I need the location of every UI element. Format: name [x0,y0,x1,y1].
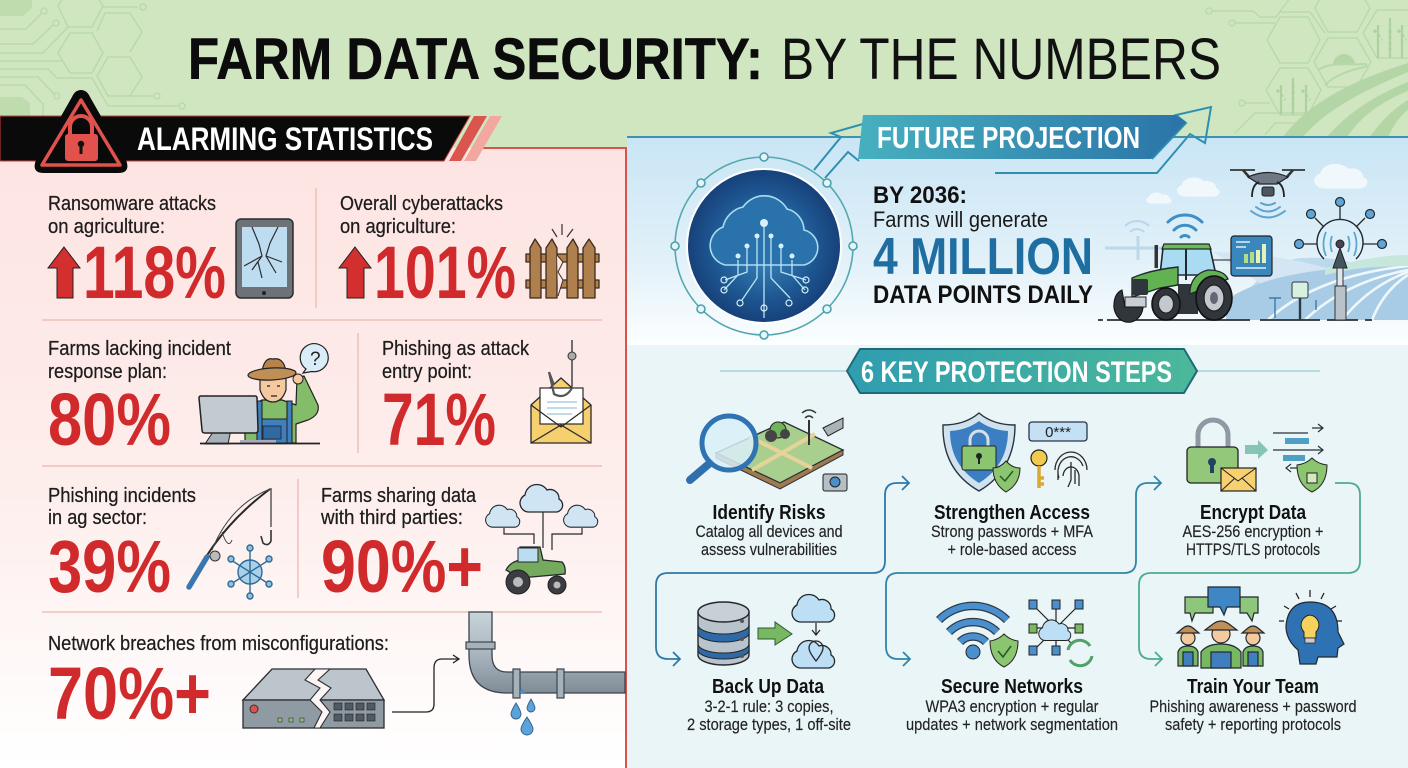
icon: confused farmer at computer: ? [310,349,321,370]
heading: 6 key protection steps: 6 KEY PROTECTION STEPS [861,356,1172,389]
header background [0,0,1408,200]
panel: protection steps [627,345,1408,768]
icon: signal tower [1292,198,1386,320]
heading: 6 key protection steps [847,349,1197,393]
icon: hook and envelope [531,340,591,443]
divider [357,333,359,453]
step: train your team: safety + reporting protocols [1165,716,1341,734]
stat: phishing incidents: 39% [48,525,171,608]
arrow: step 1 to step 2 and step 4 [656,476,909,666]
stat: incident response plan [48,337,328,461]
stat: phishing entry point: Phishing as attack [382,337,530,360]
step: secure networks: updates + network segmentation [906,716,1118,734]
icon: farmers and idea head [1177,587,1344,668]
icon: green tractor [1114,244,1232,322]
icon: fishing rod and network [189,488,272,599]
icon: drone [1230,170,1305,218]
stat: third party data sharing [320,484,598,608]
step: identify risks: Identify Risks [712,502,826,524]
step: secure networks: WPA3 encryption + regular [926,698,1099,716]
arrow: step 3 to step 6 [1139,483,1360,666]
stat: third party data sharing: with third parties: [320,506,463,529]
step: strengthen access: + role-based access [948,541,1076,559]
stat: overall cyberattacks: Overall cyberattacks [340,192,503,215]
icon: cracked tablet [236,219,293,298]
icon: magnifier over farm map [690,410,847,491]
title: FARM DATA SECURITY: [188,27,763,92]
decoration: right hex and field pattern [1206,0,1408,135]
stat: overall cyberattacks: 101% [374,231,516,314]
stat: ransomware attacks: Ransomware attacks [48,192,216,215]
stat: incident response plan: Farms lacking incident [48,337,231,360]
step: encrypt data: HTTPS/TLS protocols [1186,541,1320,559]
text: projection figures: Farms will generate [873,207,1048,232]
step: identify risks: assess vulnerabilities [701,541,837,559]
icon: warning triangle with padlock [35,90,127,173]
stat: ransomware attacks: on agriculture: [48,215,165,238]
stat: overall cyberattacks [339,192,599,314]
scene: farm hills background [1098,164,1408,320]
icon: database to clouds [698,594,835,668]
step: strengthen access [931,413,1093,559]
stat: third party data sharing: Farms sharing data [321,484,477,507]
stat: phishing entry point: 71% [382,378,496,461]
icon: wifi, shield, network [939,600,1092,667]
step: strengthen access: Strengthen Access [934,502,1090,524]
icon: tractor linked to clouds [486,484,598,594]
icon: up arrow [339,247,371,298]
divider [42,319,602,321]
stat: third party data sharing: 90%+ [321,525,483,608]
banner: alarming statistics: ALARMING STATISTICS [137,121,433,157]
banner: alarming statistics [0,116,502,161]
stat: phishing incidents: Phishing incidents [48,484,196,507]
stat: overall cyberattacks: on agriculture: [340,215,456,238]
step: encrypt data: Encrypt Data [1200,502,1307,524]
stat: network breaches [48,612,625,735]
icon: chart panel [1213,236,1272,276]
title: BY THE NUMBERS [781,27,1221,92]
divider [42,611,602,613]
text: projection figures: DATA POINTS DAILY [873,281,1093,309]
stat: phishing entry point [382,337,591,461]
stat: phishing incidents [48,484,272,608]
text: projection figures: 4 MILLION [873,228,1093,286]
arrow: step 2 to step 3 and step 5 [886,476,1161,666]
step: encrypt data: AES-256 encryption + [1182,523,1324,541]
step: back up data: 2 storage types, 1 off-site [687,716,851,734]
icon: digital cloud circle [671,153,857,339]
icon: shield, key, fingerprint: 0*** [1045,424,1071,441]
step: encrypt data [1182,420,1327,559]
stat: incident response plan: 80% [48,378,171,461]
step: identify risks [690,410,847,559]
stat: phishing incidents: in ag sector: [48,506,147,529]
step: train your team [1150,587,1356,734]
step: secure networks: Secure Networks [941,676,1083,698]
icon: shield, key, fingerprint [943,413,1087,492]
stat: phishing entry point: entry point: [382,360,472,383]
step: train your team: Phishing awareness + password [1150,698,1356,716]
step: back up data [687,594,851,734]
stat: ransomware attacks: 118% [83,231,226,314]
divider [42,465,602,467]
step: train your team: Train Your Team [1187,676,1319,698]
icon: confused farmer at computer [199,344,328,444]
stat: network breaches: 70%+ [48,652,211,735]
step: back up data: Back Up Data [712,676,825,698]
panel: future projection [627,107,1408,345]
icon: broken fence [526,224,599,298]
stat: ransomware attacks [48,192,293,314]
title [188,27,1221,92]
text: projection figures: BY 2036: [873,182,967,209]
icon: padlock, envelope, data [1187,420,1327,492]
stat: network breaches: Network breaches from misconfigurations: [48,632,389,655]
banner: future projection: FUTURE PROJECTION [877,120,1140,155]
icon: leaking pipe [466,612,625,735]
stat: incident response plan: response plan: [48,360,167,383]
icon: up arrow [48,247,80,298]
step: back up data: 3-2-1 rule: 3 copies, [704,698,834,716]
decoration: left circuit pattern [0,0,185,116]
step: identify risks: Catalog all devices and [696,523,842,541]
divider [315,188,317,308]
arrow: growth outline [814,107,1211,178]
text: projection figures [873,182,1093,309]
step: strengthen access: Strong passwords + MFA [931,523,1093,541]
arrow: switch to pipe [392,655,459,712]
icon: wifi over tractor [1168,215,1202,237]
divider [297,479,299,598]
step: secure networks [906,600,1118,734]
icon: cracked network switch [243,669,384,728]
